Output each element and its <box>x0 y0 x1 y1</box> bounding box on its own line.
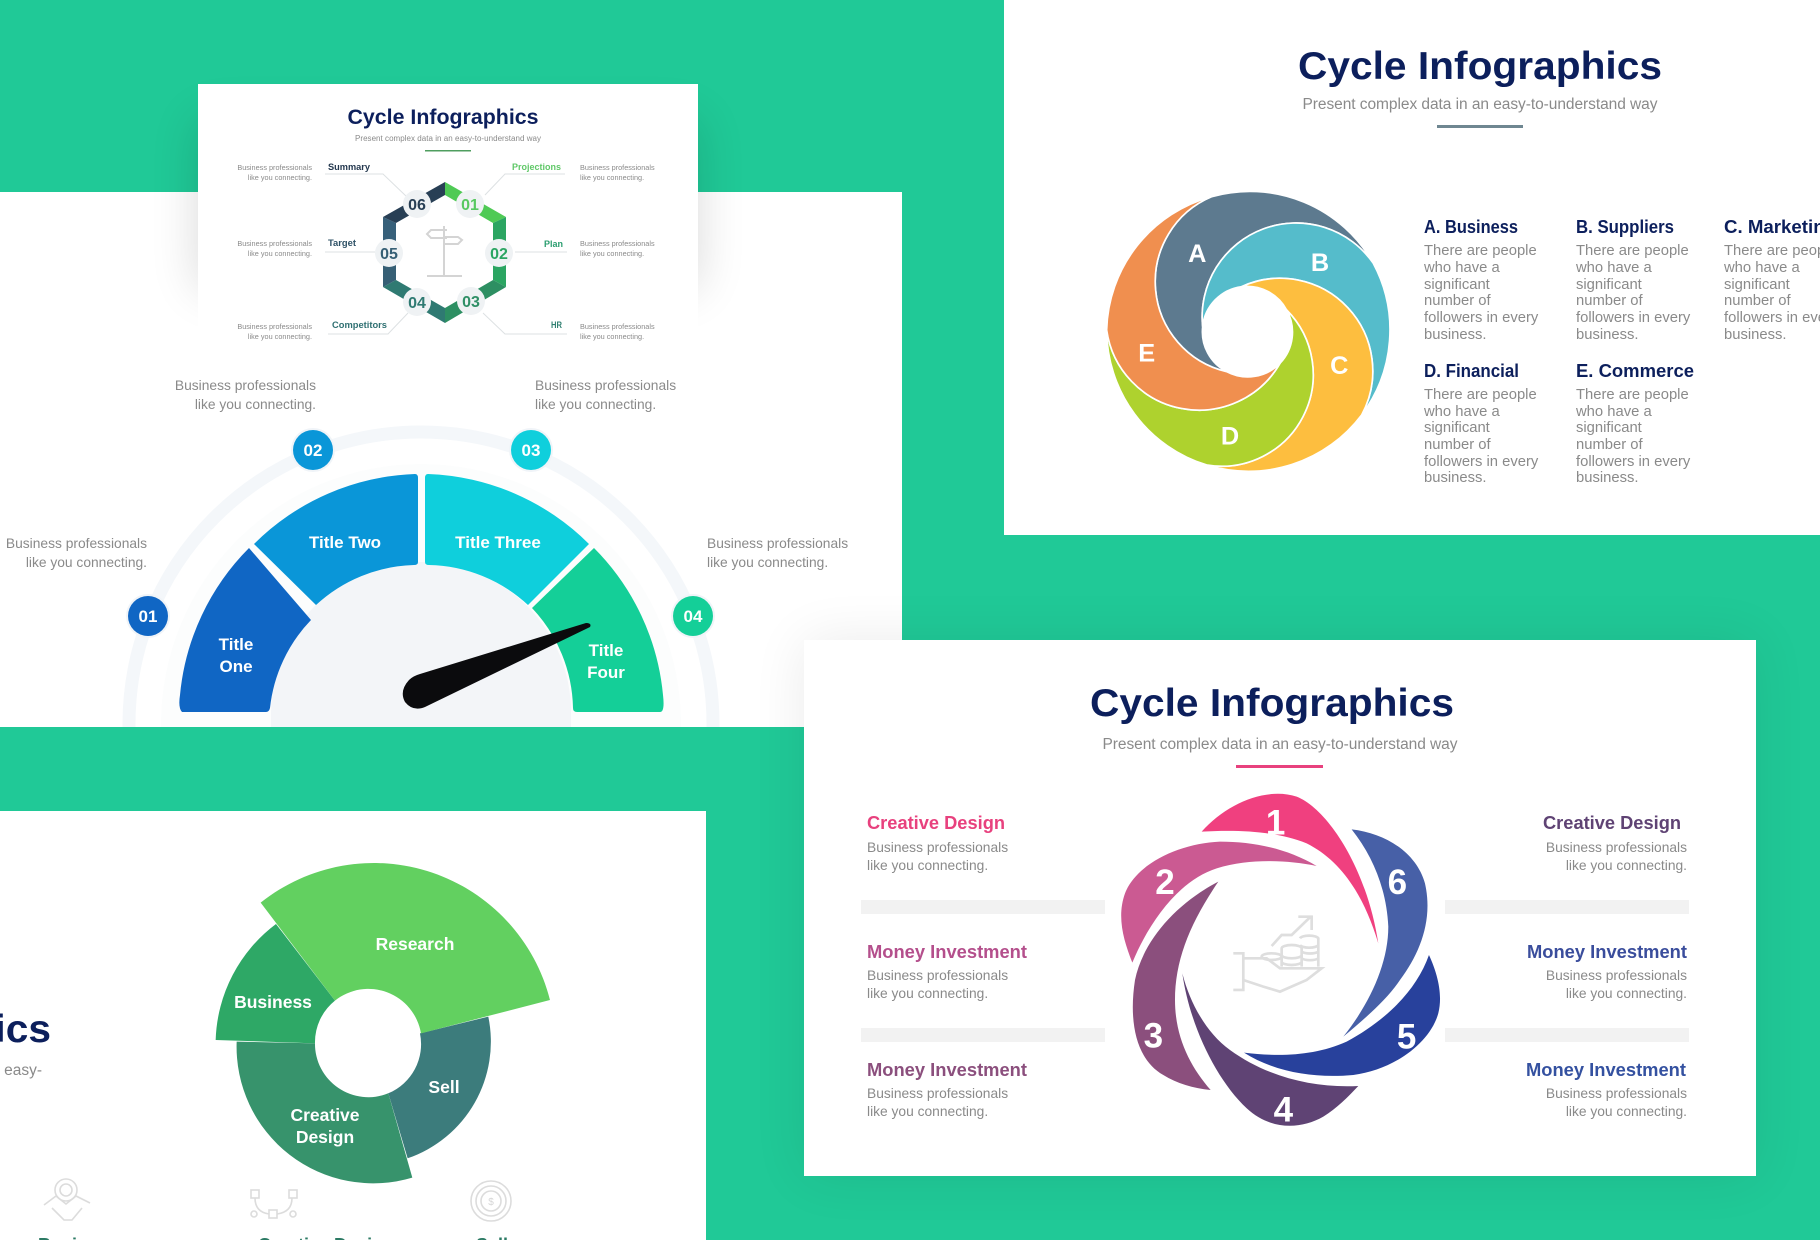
text block: left Money Investment lower: Money Investment <box>867 1060 1027 1080</box>
chart: five segment swirl: E <box>1138 340 1155 368</box>
text block: C. Marketing: number of <box>1724 293 1792 309</box>
small notes left <box>237 163 312 341</box>
note 02: Business professionals <box>175 378 316 393</box>
chart: hexagon cycle <box>375 182 513 323</box>
icon: bezier curve <box>251 1190 297 1218</box>
text block: A. Business: significant <box>1424 277 1490 293</box>
small notes right: like you connecting. <box>580 173 644 182</box>
icon: dollar target: $ <box>488 1197 494 1208</box>
donut labels: Business <box>234 992 312 1012</box>
heading: spiral slide title: Cycle Infographics <box>1090 682 1454 725</box>
text block: B. Suppliers: followers in every <box>1576 310 1691 326</box>
label: Summary: Summary <box>328 162 371 173</box>
donut labels <box>234 934 460 1147</box>
small notes right: like you connecting. <box>580 332 644 341</box>
text block: A. Business: number of <box>1424 293 1492 309</box>
panel: spiral slide bottom right <box>804 640 1756 1176</box>
gauge labels: Title <box>219 635 253 654</box>
note 04: Business professionals <box>707 536 848 551</box>
text block: E. Commerce: There are people <box>1576 387 1689 403</box>
gauge labels <box>219 533 625 682</box>
text block: right Creative Design: like you connecting. <box>1566 858 1687 873</box>
text block: C. Marketing: business. <box>1724 327 1787 343</box>
text block: left Money Investment lower: like you connecting. <box>867 1104 988 1119</box>
text block: D. Financial: D. Financial <box>1424 361 1519 381</box>
chart: offset donut <box>216 863 550 1183</box>
small notes right: like you connecting. <box>580 249 644 258</box>
note 03: like you connecting. <box>535 397 656 412</box>
gauge segment: Title Four <box>532 548 664 712</box>
small notes left: like you connecting. <box>248 332 312 341</box>
gauge segment: Title One <box>179 548 311 712</box>
text block: D. Financial <box>1423 361 1539 486</box>
text block: right Money Investment lower: Money Investment <box>1526 1060 1686 1080</box>
marker 03: 03 <box>522 441 540 460</box>
gauge labels: Title Two <box>309 533 381 552</box>
text block: D. Financial: significant <box>1424 420 1490 436</box>
text block: D. Financial: followers in every <box>1424 454 1539 470</box>
small notes left: Business professionals <box>237 322 312 331</box>
donut labels: Sell <box>428 1077 460 1097</box>
gauge labels: Title <box>589 641 623 660</box>
text block: A. Business: There are people <box>1424 243 1537 259</box>
chart: hexagon cycle: 05 <box>380 246 398 263</box>
small notes right: Business professionals <box>580 163 655 172</box>
text block: left Creative Design: like you connecting. <box>867 858 988 873</box>
text block: right Money Investment lower <box>1526 1060 1687 1119</box>
text block: right Money Investment: like you connecting. <box>1566 986 1687 1001</box>
donut labels: Design <box>296 1127 354 1147</box>
text block: E. Commerce: E. Commerce <box>1576 361 1694 381</box>
label: Competitors: Competitors <box>332 320 387 331</box>
small notes right: Business professionals <box>580 322 655 331</box>
gauge needle <box>403 623 590 709</box>
text block: E. Commerce: significant <box>1576 420 1642 436</box>
marker 01 <box>126 594 170 638</box>
text block: B. Suppliers: who have a <box>1575 260 1652 276</box>
subtitle: spiral slide: Present complex data in an easy-to-understand way <box>1102 736 1458 753</box>
text block: A. Business: A. Business <box>1424 217 1518 237</box>
text block: right Money Investment: Business professionals <box>1546 968 1687 983</box>
gauge labels: One <box>219 657 253 676</box>
chart: five segment swirl: A <box>1188 240 1206 268</box>
note 01: Business professionals <box>6 536 147 551</box>
text block: C. Marketing: who have a <box>1723 260 1800 276</box>
chart: hexagon cycle: 01 <box>461 197 479 214</box>
text block: left Money Investment <box>867 942 1027 1001</box>
note 01: like you connecting. <box>26 555 147 570</box>
label: Target: Target <box>328 238 357 249</box>
marker 03 <box>509 428 553 472</box>
text block: A. Business: followers in every <box>1424 310 1539 326</box>
chart: six blade spiral: 5 <box>1397 1017 1416 1056</box>
chart: hexagon cycle: 04 <box>408 295 426 312</box>
text block: D. Financial: There are people <box>1424 387 1537 403</box>
text block: A. Business: who have a <box>1423 260 1500 276</box>
chart: five segment swirl: D <box>1221 422 1239 450</box>
icon: hand with coins <box>1233 917 1322 992</box>
note 03: Business professionals <box>535 378 676 393</box>
text block: D. Financial: business. <box>1424 470 1487 486</box>
chart: six blade spiral: 2 <box>1155 863 1175 902</box>
donut labels: Research <box>376 934 454 954</box>
text block: E. Commerce: who have a <box>1575 404 1652 420</box>
marker 02 <box>291 428 335 472</box>
label: Projections: Projections <box>512 162 561 173</box>
note 04: like you connecting. <box>707 555 828 570</box>
marker 01: 01 <box>139 607 157 626</box>
icon captions <box>39 1238 507 1240</box>
panel: pie slide bottom left <box>0 811 706 1240</box>
text block: left Money Investment: Business professionals <box>867 968 1008 983</box>
marker 04 <box>671 594 715 638</box>
subtitle: swirl slide: Present complex data in an easy-to-understand way <box>1302 96 1658 113</box>
text block: right Money Investment lower: Business professionals <box>1546 1086 1687 1101</box>
text block: B. Suppliers: significant <box>1576 277 1642 293</box>
gauge segment: Title Two <box>254 474 418 605</box>
chart: six blade spiral: 3 <box>1144 1017 1163 1056</box>
text block: C. Marketing: significant <box>1724 277 1790 293</box>
subtitle: hexagon slide: Present complex data in an easy-to-understand way <box>355 134 541 143</box>
chart: five segment swirl <box>1107 191 1390 471</box>
label: HR: HR <box>551 320 562 331</box>
text block: left Money Investment lower <box>867 1060 1027 1119</box>
text block: B. Suppliers: There are people <box>1576 243 1689 259</box>
note 02 <box>175 378 316 412</box>
text block: E. Commerce: number of <box>1576 437 1644 453</box>
text block: D. Financial: who have a <box>1423 404 1500 420</box>
chart: hexagon cycle: 02 <box>490 246 508 263</box>
text block: A. Business <box>1423 217 1539 343</box>
chart: six blade spiral: 4 <box>1274 1091 1294 1130</box>
chart: six blade spiral: 1 <box>1266 803 1285 842</box>
donut labels: Creative <box>290 1105 360 1125</box>
text block: D. Financial: number of <box>1424 437 1492 453</box>
gauge labels: Title Three <box>455 533 541 552</box>
small notes left: Business professionals <box>237 163 312 172</box>
text block: left Money Investment: like you connecting. <box>867 986 988 1001</box>
heading: hexagon slide title: Cycle Infographics <box>348 106 538 129</box>
note 02: like you connecting. <box>195 397 316 412</box>
gauge inner dial <box>271 562 571 727</box>
text block: right Creative Design <box>1543 813 1687 873</box>
text block: B. Suppliers: number of <box>1576 293 1644 309</box>
text block: A. Business: business. <box>1424 327 1487 343</box>
icon: handshake gear <box>44 1179 90 1220</box>
marker 04: 04 <box>684 607 703 626</box>
chart: hexagon cycle: 06 <box>408 197 426 214</box>
text block: right Creative Design: Business professionals <box>1546 840 1687 855</box>
chart: five segment swirl: C <box>1330 352 1348 380</box>
text block: right Money Investment lower: like you connecting. <box>1566 1104 1687 1119</box>
small notes left: like you connecting. <box>248 249 312 258</box>
text block: E. Commerce: business. <box>1576 470 1639 486</box>
text block: C. Marketing <box>1723 217 1820 343</box>
chart: six blade spiral: 6 <box>1388 863 1407 902</box>
shadows cast by overlapping slides <box>198 120 1756 1176</box>
gauge labels: Four <box>587 663 625 682</box>
heading: swirl slide title: Cycle Infographics <box>1298 45 1662 88</box>
note 03 <box>535 378 676 412</box>
text block: B. Suppliers <box>1575 217 1691 343</box>
panel: gauge slide <box>0 192 902 727</box>
text block: left Money Investment: Money Investment <box>867 942 1027 962</box>
text block: left Creative Design: Business professionals <box>867 840 1008 855</box>
label: Plan: Plan <box>544 239 563 250</box>
note 01 <box>6 536 147 570</box>
text block: right Money Investment: Money Investment <box>1527 942 1687 962</box>
text block: right Creative Design: Creative Design <box>1543 813 1681 833</box>
small notes right <box>580 163 655 341</box>
icon: dollar target <box>471 1181 511 1221</box>
icon: signpost <box>427 226 462 276</box>
gauge segment: Title Three <box>425 474 589 605</box>
small notes left: Business professionals <box>237 239 312 248</box>
panel: hexagon slide <box>198 84 698 350</box>
small notes right: Business professionals <box>580 239 655 248</box>
text block: E. Commerce: followers in every <box>1576 454 1691 470</box>
marker 02: 02 <box>304 441 322 460</box>
panel: swirl slide top right <box>1004 0 1820 535</box>
chart: hexagon cycle: 03 <box>462 294 480 311</box>
text block: B. Suppliers: B. Suppliers <box>1576 217 1674 237</box>
note 04 <box>707 536 848 570</box>
small notes left: like you connecting. <box>248 173 312 182</box>
chart: five segment swirl: B <box>1311 249 1329 277</box>
text block: right Money Investment <box>1527 942 1687 1001</box>
text block: left Creative Design: Creative Design <box>867 813 1005 833</box>
text block: left Creative Design <box>867 813 1008 873</box>
text block: left Money Investment lower: Business professionals <box>867 1086 1008 1101</box>
text block: E. Commerce <box>1575 361 1694 486</box>
connector lines <box>325 174 567 334</box>
text block: B. Suppliers: business. <box>1576 327 1639 343</box>
chart: six blade spiral <box>1121 794 1440 1130</box>
